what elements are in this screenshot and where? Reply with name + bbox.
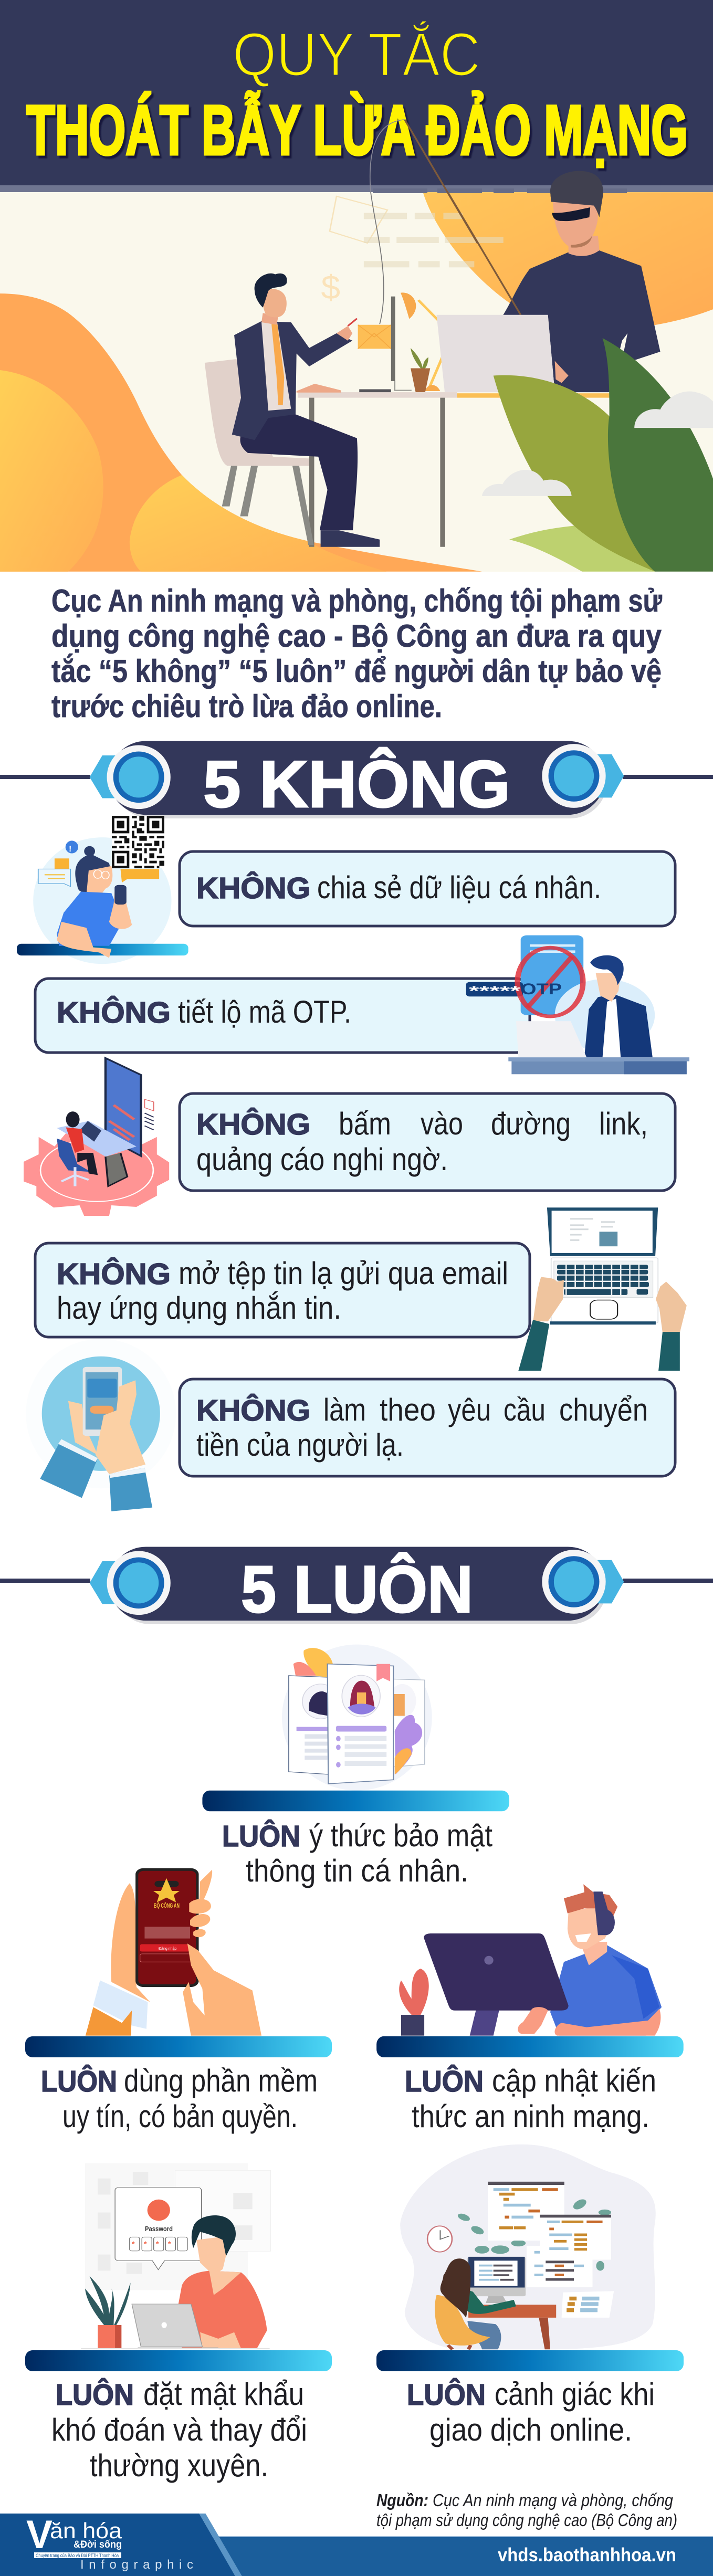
heading text: 5 KHÔNG	[203, 747, 510, 821]
card: KHÔNG bấm vào đường link: vào	[421, 1106, 463, 1141]
hero illustration: scammer fishing for office worker	[0, 120, 713, 572]
text: LUÔN cảnh giác khi	[407, 2377, 655, 2447]
card: KHÔNG bấm vào đường link: bấm	[339, 1106, 391, 1141]
source note	[376, 2490, 677, 2530]
icon: hands holding banking phone	[26, 1339, 176, 1511]
icon: woman entering password: *	[156, 2239, 159, 2248]
desk with monitor, lamp, plant and laptop	[298, 292, 610, 547]
fishing rod and line	[370, 120, 521, 324]
icon: hand holding police app phone: BỘ CÔNG AN	[154, 1901, 180, 1909]
icon: woman coding at desk	[400, 2144, 656, 2349]
text: LUÔN cập nhật kiến	[405, 2063, 656, 2134]
website: vhds.baothanhhoa.vn	[498, 2544, 676, 2566]
logo: ăn hóa	[50, 2518, 122, 2543]
card: KHÔNG tiết lộ mã OTP: KHÔNG	[57, 995, 171, 1029]
scammer hair over banner	[550, 171, 603, 206]
card: KHÔNG bấm vào đường link: quảng cáo nghi ngờ.	[196, 1142, 448, 1177]
icon: man at laptop with OTP prohibited sign	[466, 935, 689, 1074]
card: KHÔNG bấm vào đường link: KHÔNG	[196, 1107, 310, 1141]
icon: woman entering password: Password	[145, 2225, 173, 2233]
text: LUÔN dùng phần mềm: dùng phần mềm	[124, 2063, 318, 2098]
bar under password illustration	[25, 2350, 332, 2371]
card: KHÔNG làm theo yêu cầu chuyển tiền: KHÔNG	[196, 1393, 310, 1427]
text: LUÔN ý thức bảo mật: ý thức bảo mật	[309, 1818, 492, 1853]
card: KHÔNG làm theo yêu cầu chuyển tiền: cầu	[504, 1392, 546, 1427]
icon: personal profile cards	[202, 1645, 509, 1811]
text: LUÔN cập nhật kiến: thức an ninh mạng.	[412, 2099, 649, 2134]
card: KHÔNG mở tệp tin lạ: hay ứng dụng nhắn tin.	[57, 1290, 341, 1326]
text: LUÔN đặt mật khẩu: đặt mật khẩu	[143, 2377, 304, 2412]
inner yellow wave	[0, 370, 103, 572]
text: LUÔN đặt mật khẩu: thường xuyên.	[90, 2448, 268, 2483]
bar under phone illustration	[25, 2036, 332, 2057]
section header: 5 LUÔN	[0, 1547, 713, 1626]
text: LUÔN ý thức bảo mật	[222, 1818, 492, 1888]
card: KHÔNG chia sẻ dữ liệu cá nhân	[180, 851, 675, 926]
icon: hands typing on laptop	[518, 1207, 687, 1371]
QR code	[112, 816, 164, 868]
logo: Chuyên trang của Báo và Đài PTTH Thanh Hóa	[36, 2553, 119, 2558]
title banner	[0, 0, 713, 193]
card: KHÔNG bấm vào đường link: link,	[599, 1106, 648, 1141]
section header: 5 KHÔNG	[0, 741, 713, 821]
text: LUÔN dùng phần mềm: LUÔN	[41, 2064, 117, 2098]
rod over banner	[370, 120, 477, 243]
logo	[26, 2512, 193, 2572]
text: LUÔN cảnh giác khi: giao dịch online.	[429, 2412, 632, 2447]
icon: woman entering password: *	[132, 2239, 135, 2248]
lower yellow wave	[130, 475, 386, 572]
source note: Cục An ninh mạng và phòng, chống	[433, 2490, 674, 2510]
icon: man with headset at monitor	[376, 1884, 684, 2057]
text: LUÔN dùng phần mềm: uy tín, có bản quyền.	[62, 2099, 298, 2134]
source note: Nguồn:	[376, 2490, 428, 2510]
card: KHÔNG bấm vào đường link	[180, 1094, 675, 1191]
card: KHÔNG bấm vào đường link: đường	[491, 1106, 571, 1141]
icon: hand holding police app phone: Đăng nhập	[159, 1947, 176, 1951]
text: LUÔN cảnh giác khi: cảnh giác khi	[495, 2377, 655, 2412]
clouds	[482, 392, 713, 496]
intro paragraph: trước chiêu trò lừa đảo online.	[51, 689, 442, 724]
icon: person at desk on gear with phone	[24, 1058, 169, 1216]
text: LUÔN ý thức bảo mật: thông tin cá nhân.	[246, 1853, 468, 1888]
bar under coding illustration	[376, 2350, 684, 2371]
card: KHÔNG chia sẻ dữ liệu cá nhân: KHÔNG	[196, 871, 310, 905]
card: KHÔNG mở tệp tin lạ	[35, 1243, 530, 1337]
text: LUÔN ý thức bảo mật: LUÔN	[222, 1819, 300, 1853]
title line 1: QUY TẮC	[233, 20, 480, 89]
icon: man at laptop with OTP prohibited sign: OTP	[521, 981, 562, 998]
faint email and dollar decor	[330, 196, 504, 267]
office worker at desk	[205, 274, 380, 547]
card: KHÔNG làm theo yêu cầu chuyển tiền: làm	[323, 1392, 366, 1427]
text: LUÔN đặt mật khẩu	[51, 2377, 307, 2483]
orange sun shape	[423, 192, 713, 329]
icon: woman entering password: *	[144, 2239, 147, 2248]
text: LUÔN cảnh giác khi: LUÔN	[407, 2378, 486, 2412]
dollar sign: $	[321, 268, 340, 306]
icon: woman entering password: *	[168, 2239, 171, 2248]
card: KHÔNG tiết lộ mã OTP: tiết lộ mã OTP.	[178, 994, 351, 1029]
text: LUÔN đặt mật khẩu: LUÔN	[56, 2378, 134, 2412]
icon: woman with phone and QR code	[17, 816, 188, 964]
logo: V	[26, 2512, 53, 2557]
card: KHÔNG làm theo yêu cầu chuyển tiền	[180, 1379, 675, 1476]
icon: woman with phone and QR code: !	[69, 845, 71, 854]
card: KHÔNG làm theo yêu cầu chuyển tiền: chuyển	[559, 1392, 648, 1427]
scammer	[502, 171, 660, 392]
heading text: 5 LUÔN	[241, 1552, 473, 1626]
ghost band marks	[373, 188, 627, 193]
logo: Infographic	[80, 2558, 193, 2572]
text: LUÔN đặt mật khẩu: khó đoán và thay đổi	[51, 2412, 307, 2447]
text: LUÔN dùng phần mềm	[41, 2063, 318, 2134]
intro paragraph	[51, 583, 662, 724]
card: KHÔNG chia sẻ dữ liệu cá nhân: chia sẻ dữ liệu cá nhân.	[317, 870, 601, 905]
icon: hand holding police app phone	[86, 1868, 261, 2036]
card: KHÔNG làm theo yêu cầu chuyển tiền: theo	[380, 1392, 436, 1427]
card: KHÔNG mở tệp tin lạ: mở tệp tin lạ gửi qua email	[179, 1256, 508, 1291]
card: KHÔNG làm theo yêu cầu chuyển tiền: tiền của người lạ.	[196, 1427, 404, 1463]
card: KHÔNG làm theo yêu cầu chuyển tiền: yêu	[448, 1392, 491, 1427]
phishing envelope	[358, 325, 391, 349]
footer band	[0, 2512, 713, 2576]
card: KHÔNG mở tệp tin lạ: KHÔNG	[57, 1257, 171, 1291]
text: LUÔN cập nhật kiến: cập nhật kiến	[492, 2063, 656, 2098]
logo: &Đời sống	[74, 2539, 122, 2550]
icon: woman entering password	[81, 2163, 270, 2349]
card: KHÔNG tiết lộ mã OTP	[35, 979, 530, 1053]
left orange wave	[0, 293, 482, 572]
text: LUÔN cập nhật kiến: LUÔN	[405, 2064, 484, 2098]
icon: man at laptop with OTP prohibited sign: *****	[469, 984, 521, 998]
plant leaves	[494, 338, 713, 572]
